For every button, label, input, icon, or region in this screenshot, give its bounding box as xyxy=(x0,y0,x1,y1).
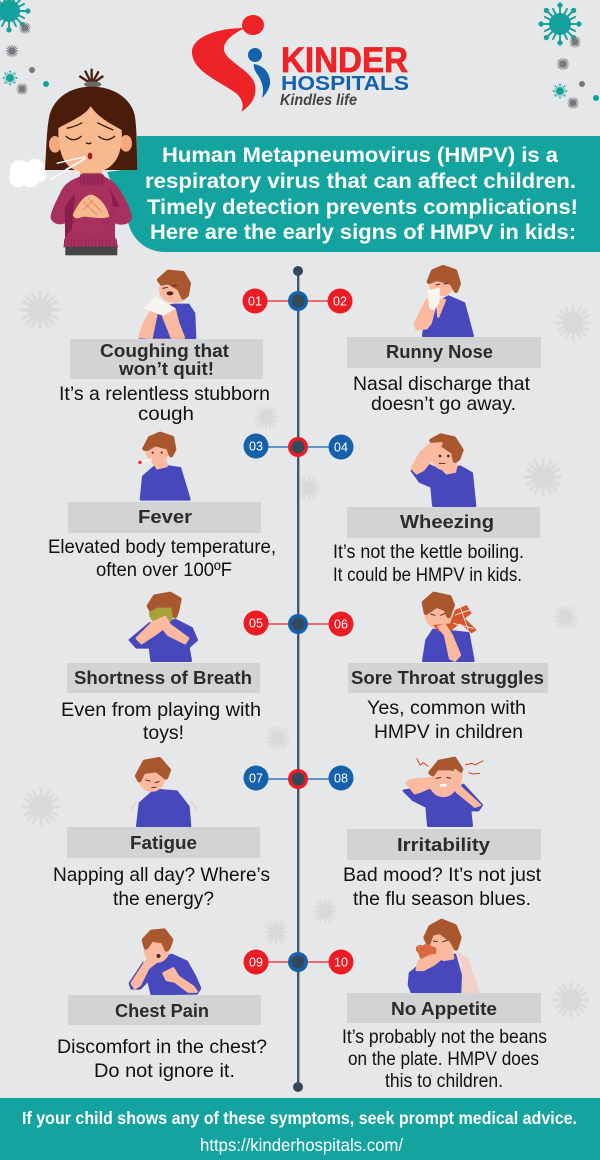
footer url: https://kinderhospitals.com/ xyxy=(200,1135,403,1155)
symptom 10: no appetite xyxy=(342,921,547,1092)
logo wordmark KINDER: KINDER xyxy=(281,41,408,80)
banner text xyxy=(145,144,578,244)
timeline marker row 03 04: 04 xyxy=(334,440,348,454)
description line 2: toys! xyxy=(143,722,184,744)
timeline marker row 07 08: 07 xyxy=(249,772,263,786)
icon: grey viruses top left xyxy=(6,22,34,95)
description line 2: Do not ignore it. xyxy=(94,1060,235,1082)
description: Even from playing with xyxy=(61,699,261,721)
symptom 02: runny nose xyxy=(347,267,541,415)
icon: teal viruses top right xyxy=(539,3,598,101)
timeline marker row 05 06: 06 xyxy=(334,618,348,632)
heading: Fever xyxy=(138,507,192,527)
symptom 05: shortness of breath xyxy=(61,594,261,744)
timeline marker row 09 10: 09 xyxy=(249,956,263,970)
description: Discomfort in the chest? xyxy=(57,1036,267,1058)
banner background xyxy=(107,136,600,252)
neck xyxy=(80,167,102,177)
description: It’s probably not the beans xyxy=(342,1026,547,1048)
timeline marker row 09 10: 10 xyxy=(334,956,348,970)
description line 2: doesn’t go away. xyxy=(371,393,516,415)
description line 2: on the plate. HMPV does xyxy=(348,1048,539,1070)
description: Elevated body temperature, xyxy=(48,536,276,558)
background virus pattern xyxy=(20,290,591,1018)
heading: Wheezing xyxy=(400,512,494,532)
label box xyxy=(68,995,261,1025)
sweater shading xyxy=(65,188,120,237)
label box xyxy=(67,827,260,858)
heading: Fatigue xyxy=(130,833,197,853)
timeline marker row 01 02 xyxy=(242,288,352,314)
label box xyxy=(347,829,541,860)
timeline marker row 01 02: 02 xyxy=(333,294,347,308)
illustration: boy holding chest xyxy=(130,931,200,994)
top knot xyxy=(79,69,103,84)
collar xyxy=(79,173,105,185)
timeline marker row 05 06: 05 xyxy=(249,616,263,630)
illustration: boy blowing nose xyxy=(415,267,473,336)
heading: Runny Nose xyxy=(386,342,493,362)
label box xyxy=(68,502,261,533)
banner text: Timely detection prevents complications! xyxy=(147,196,578,219)
description: It’s a relentless stubborn xyxy=(59,383,270,405)
timeline marker row 07 08 xyxy=(244,766,354,790)
label box xyxy=(70,339,263,379)
heading: Coughing that xyxy=(100,341,229,361)
face xyxy=(58,106,122,173)
banner text: Here are the early signs of HMPV in kids: xyxy=(150,221,576,244)
timeline marker row 03 04 xyxy=(244,434,354,460)
logo wordmark HOSPITALS: HOSPITALS xyxy=(281,73,409,95)
trousers xyxy=(65,247,117,255)
description: Bad mood? It’s not just xyxy=(343,864,542,886)
illustration: sick girl xyxy=(9,69,137,255)
footer xyxy=(0,1098,600,1160)
description line 3: this to children. xyxy=(385,1070,503,1092)
ears xyxy=(49,136,61,153)
heading: Shortness of Breath xyxy=(74,668,252,688)
heading: Chest Pain xyxy=(115,1001,209,1021)
symptom 03: fever xyxy=(48,434,276,581)
banner text: Human Metapneumovirus (HMPV) is a xyxy=(162,144,558,167)
breath lines xyxy=(50,157,86,180)
illustration: boy with mug and blanket xyxy=(409,921,480,993)
description: Nasal discharge that xyxy=(353,373,531,395)
heading: Sore Throat struggles xyxy=(351,668,544,688)
footer background xyxy=(0,1098,600,1160)
cuffs xyxy=(67,210,115,223)
timeline marker row 01 02: 01 xyxy=(248,294,262,308)
eyes, brows and mouth xyxy=(66,123,115,144)
hair xyxy=(45,87,137,170)
timeline marker row 09 10 xyxy=(244,950,354,974)
hem xyxy=(64,231,118,255)
description: Yes, common with xyxy=(367,697,526,719)
description: Napping all day? Where’s xyxy=(53,864,270,886)
sweater xyxy=(51,175,132,247)
timeline spine xyxy=(293,266,303,1092)
symptom 01: coughing xyxy=(59,272,270,425)
icon: logo red figure xyxy=(192,15,264,112)
icon: teal viruses top left xyxy=(0,0,49,87)
illustration: boy with thermometer xyxy=(138,434,189,499)
hands xyxy=(73,195,109,218)
illustration: green faced boy xyxy=(130,594,197,661)
heading: Irritability xyxy=(397,835,490,855)
symptom 04: wheezing xyxy=(333,436,540,586)
description line 2: HMPV in children xyxy=(374,721,523,743)
description line 2: the flu season blues. xyxy=(353,888,531,910)
label box xyxy=(347,337,541,368)
breath cloud xyxy=(9,159,47,187)
icon: logo blue figure xyxy=(248,48,270,98)
description line 2: cough xyxy=(138,403,194,425)
label box xyxy=(347,993,541,1023)
label box xyxy=(348,663,548,693)
description: It’s not the kettle boiling. xyxy=(333,541,524,563)
symptom 08: irritability xyxy=(343,758,542,910)
heading: No Appetite xyxy=(391,999,497,1019)
logo tagline: Kindles life xyxy=(280,92,357,109)
intro banner xyxy=(107,136,600,252)
description line 2: the energy? xyxy=(113,888,214,910)
illustration: boy holding forehead xyxy=(412,436,475,506)
symptom 07: fatigue xyxy=(53,759,270,910)
icon: grey viruses top right xyxy=(557,36,584,109)
timeline marker row 07 08: 08 xyxy=(334,772,348,786)
illustration: coughing boy xyxy=(139,272,195,338)
symptom 09: chest pain xyxy=(57,931,267,1082)
heading line 2: won’t quit! xyxy=(118,359,214,379)
description line 2: It could be HMPV in kids. xyxy=(333,564,522,586)
description line 2: often over 100ºF xyxy=(96,559,232,581)
illustration: tired boy xyxy=(131,759,197,826)
label box xyxy=(347,507,540,538)
timeline marker row 03 04: 03 xyxy=(249,440,263,454)
logo: Kinder Hospitals xyxy=(192,15,409,112)
symptom 06: sore throat xyxy=(348,594,548,743)
illustration: boy with sore throat xyxy=(423,594,477,661)
label box xyxy=(67,663,260,693)
banner text: respiratory virus that can affect children. xyxy=(145,170,576,193)
illustration: irritated boy xyxy=(404,758,483,826)
timeline marker row 05 06 xyxy=(244,610,354,636)
